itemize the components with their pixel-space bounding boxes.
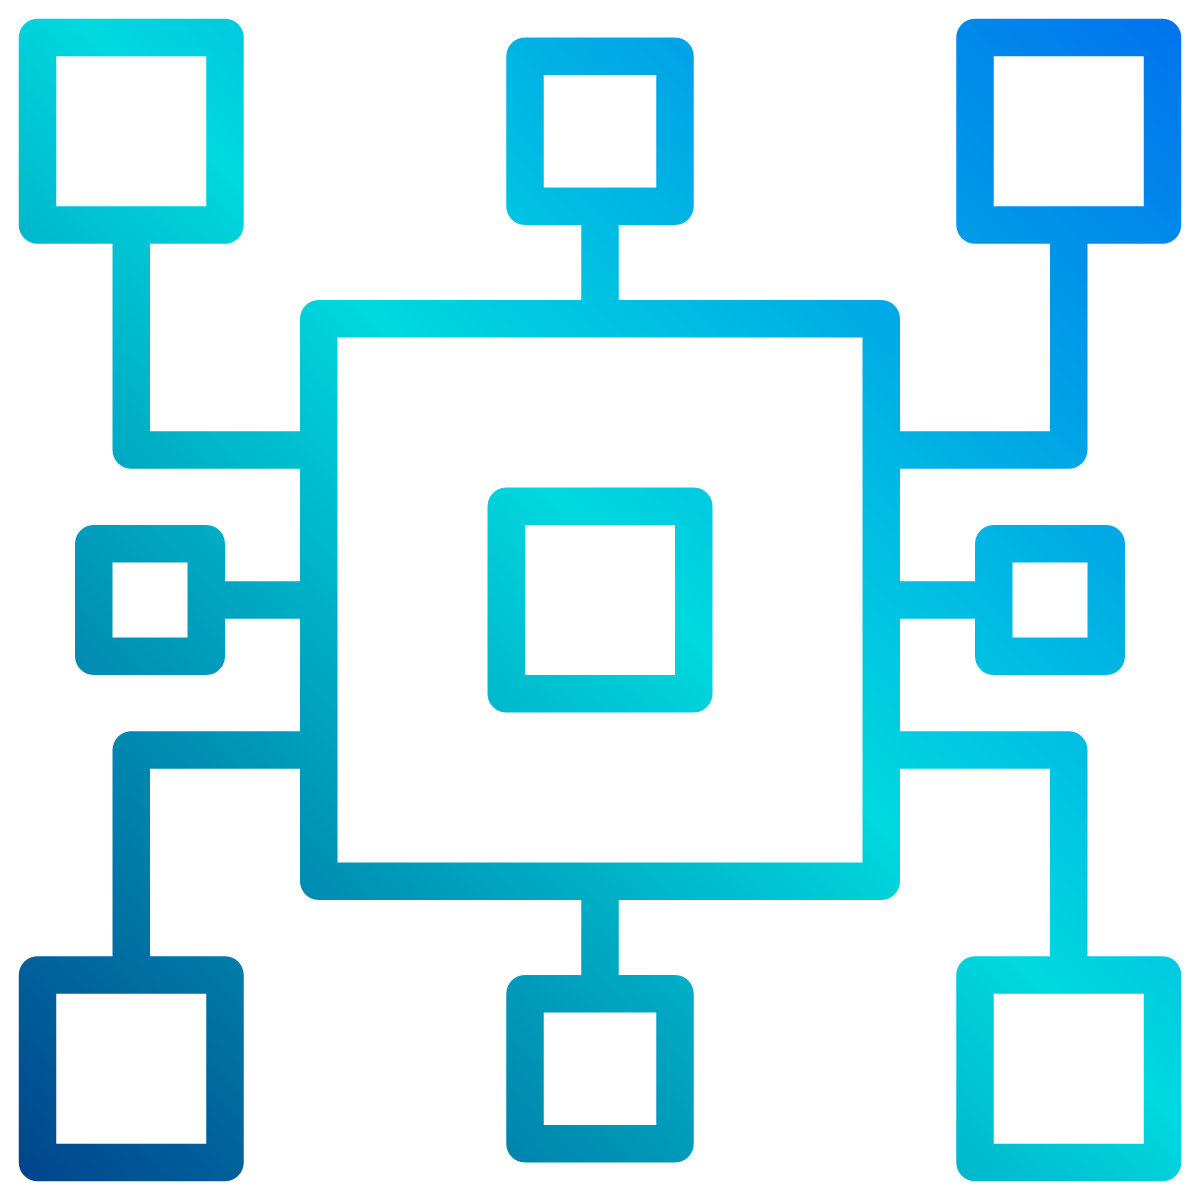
node: bottom centre square	[525, 994, 675, 1144]
connector: top-left node to hub	[131, 225, 319, 450]
node: right small square	[994, 544, 1106, 656]
node: bottom-left square	[38, 975, 225, 1162]
connector: bottom node to hub	[581, 881, 619, 994]
node: top centre square	[525, 56, 675, 206]
connector: bottom-right node to hub	[881, 750, 1069, 975]
node: top-left square	[38, 38, 225, 225]
connector: top node to hub	[581, 206, 619, 319]
connector: left node to hub	[206, 581, 319, 619]
connector: bottom-left node to hub	[131, 750, 319, 975]
inner core square	[506, 506, 694, 694]
connector: right node to hub	[881, 581, 994, 619]
connector: top-right node to hub	[881, 225, 1069, 450]
central hub frame	[319, 319, 881, 881]
node: top-right square	[975, 38, 1162, 225]
node: left small square	[94, 544, 206, 656]
node: bottom-right square	[975, 975, 1162, 1162]
